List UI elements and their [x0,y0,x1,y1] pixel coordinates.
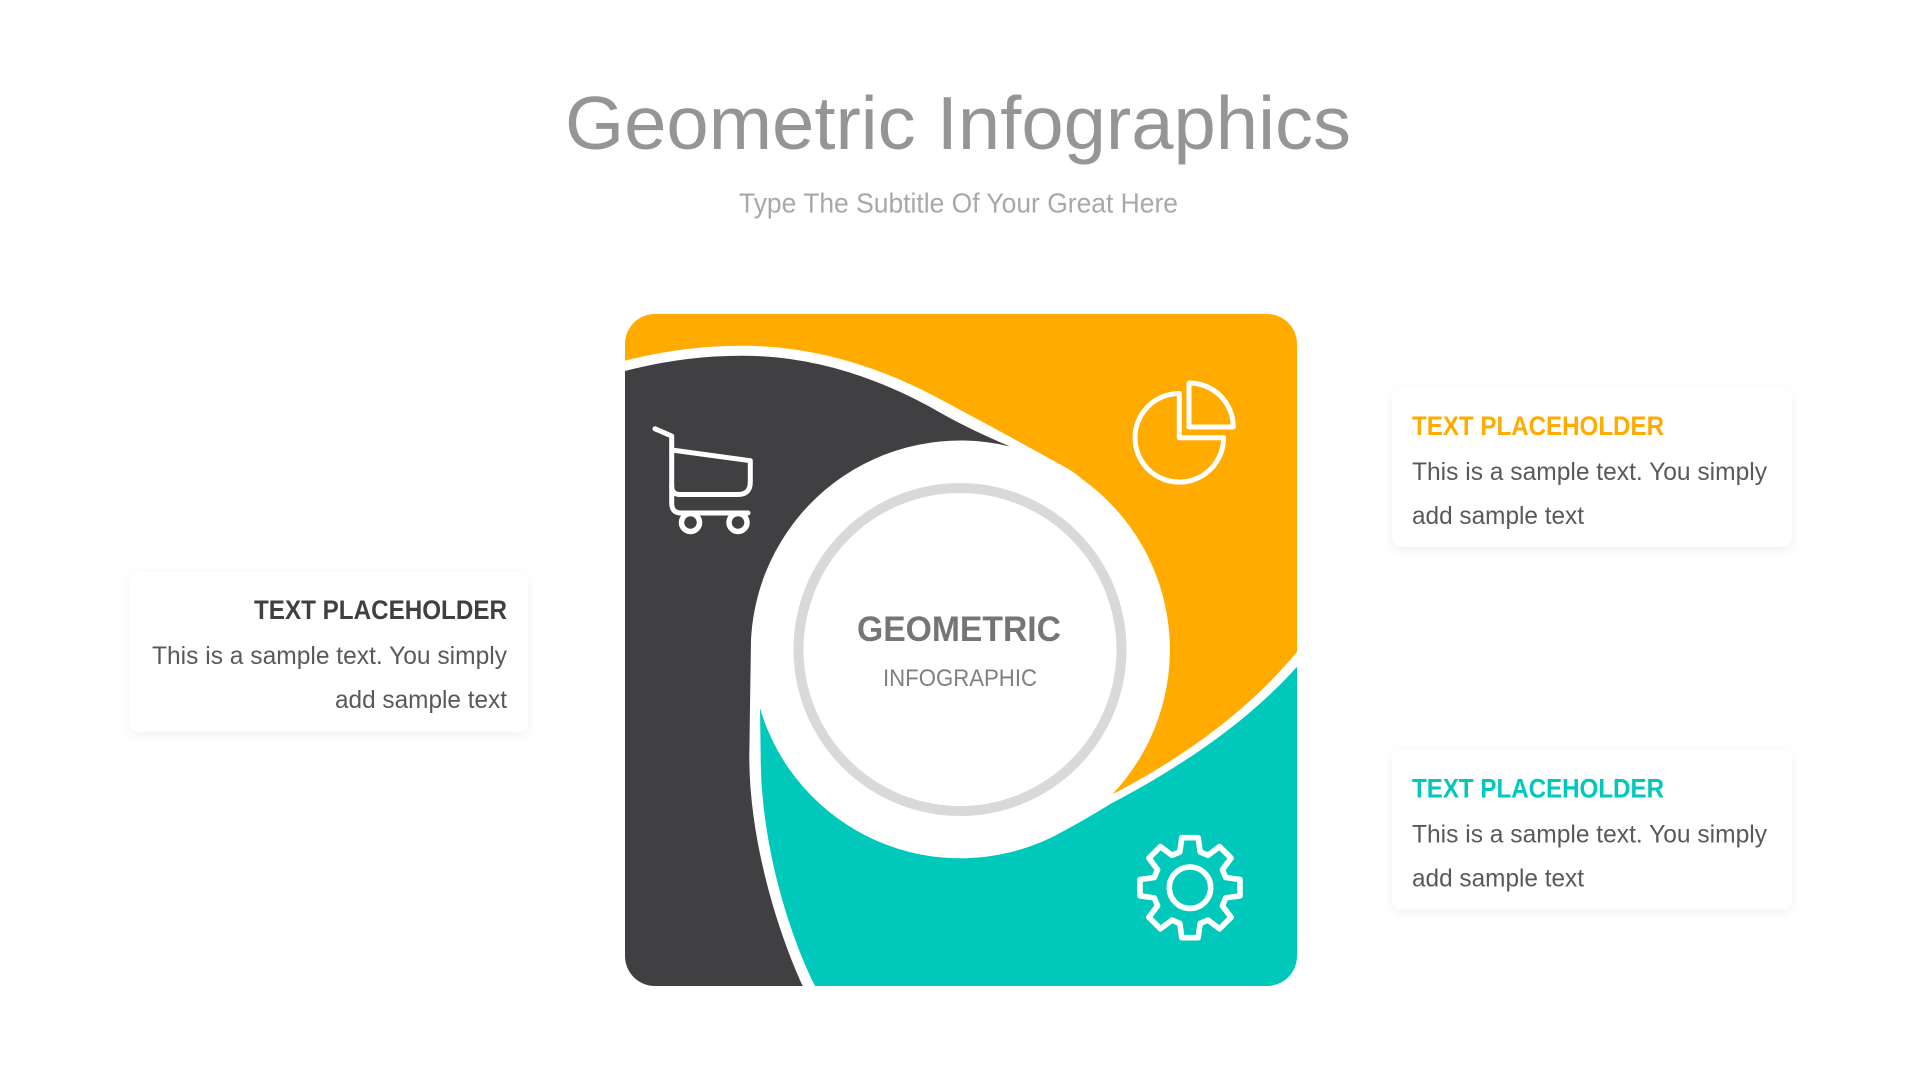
subtitle: Type The Subtitle Of Your Great Here [739,188,1178,218]
icon: shopping cart [655,429,750,532]
card heading: TEXT PLACEHOLDER [254,595,507,625]
card background [1392,387,1792,547]
card body line 2: add sample text [1412,502,1584,530]
segment: teal [760,667,1297,986]
segment: dark [625,356,1010,986]
card body line 2: add sample text [335,686,507,714]
segment: orange [625,314,1297,794]
icon: pie chart [1135,383,1233,482]
title: Geometric Infographics [565,81,1351,165]
card body line 1: This is a sample text. You simply [152,642,507,670]
panel: right top card (orange) [1392,387,1792,547]
card body line 1: This is a sample text. You simply [1412,458,1767,486]
segments of the square [625,314,1297,986]
panel: right bottom card (teal) [1392,750,1792,910]
card body line 2: add sample text [1412,864,1584,892]
card heading: TEXT PLACEHOLDER [1412,774,1664,804]
card body line 1: This is a sample text. You simply [1412,820,1767,848]
center label: INFOGRAPHIC: INFOGRAPHIC [883,665,1037,692]
center label: GEOMETRIC: GEOMETRIC [857,610,1061,649]
center circle ring [798,488,1122,811]
panel: geometric square diagram [625,314,1297,986]
icon: gear [1140,838,1240,938]
card background [129,572,528,732]
card background [1392,750,1792,910]
panel: left card (dark) [129,572,528,732]
card heading: TEXT PLACEHOLDER [1412,411,1664,441]
